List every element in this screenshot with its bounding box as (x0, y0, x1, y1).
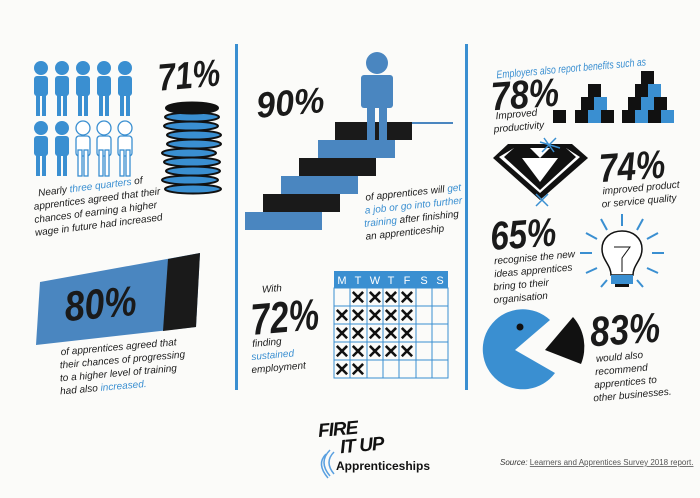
text: productivity: productivity (492, 120, 546, 136)
icon: light bulb (580, 214, 664, 287)
icon: staircase (245, 122, 453, 230)
chart: calendar: ✕ (383, 306, 399, 327)
text: new ideas: bring to their (493, 277, 550, 293)
chart: calendar: ✕ (383, 288, 399, 309)
chart: calendar: F (404, 275, 411, 287)
icon: coin stack (162, 102, 221, 194)
chart: calendar: ✕ (334, 306, 350, 327)
chart: calendar: ✕ (350, 342, 366, 363)
panel: employer benefits (483, 56, 682, 404)
text: quality: improved product (602, 180, 681, 197)
text: new ideas: ideas apprentices (494, 262, 573, 280)
panel: progression 80%: 80% (62, 277, 138, 330)
text: job or training: of apprentices will get (365, 183, 462, 204)
text: progression: had also increased. (60, 379, 147, 397)
text: recommend: apprentices to (594, 375, 658, 391)
chart: calendar: ✕ (383, 342, 399, 363)
chart: calendar (334, 271, 448, 381)
text: quality: or service quality (601, 193, 678, 210)
bar: 80% (36, 253, 200, 345)
chart: calendar: ✕ (399, 324, 415, 345)
panel: 90% staircase (245, 52, 467, 243)
panel: 72% sustained employment (249, 271, 448, 381)
stat: 83%: 83% (588, 304, 662, 355)
text: recommend: recommend (595, 363, 649, 378)
stat: 78%: 78% (490, 71, 560, 119)
stat: 72%: 72% (249, 290, 321, 345)
text: three quarters: Nearly three quarters of (38, 175, 143, 199)
chart: calendar: S (420, 275, 428, 287)
text: new ideas: organisation (493, 291, 549, 306)
chart: calendar: ✕ (383, 324, 399, 345)
chart: calendar: ✕ (399, 342, 415, 363)
chart: calendar: ✕ (399, 288, 415, 309)
chart: calendar: ✕ (367, 306, 383, 327)
text: progression: of apprentices agreed that (60, 337, 178, 358)
text: source: Source: Learners and Apprentices Survey 2018 report. (500, 458, 693, 467)
text: sustained employment: finding (252, 336, 283, 350)
chart: calendar: ✕ (367, 324, 383, 345)
icon: people grid (34, 61, 132, 176)
logo: fire it up apprenticeships: FIRE (317, 417, 360, 442)
divider: left (235, 44, 238, 390)
stat: 71%: 71% (156, 52, 222, 100)
chart: calendar: ✕ (350, 288, 366, 309)
logo: fire it up apprenticeships (317, 417, 430, 478)
stat: 90%: 90% (255, 79, 326, 126)
icon: block pyramids (553, 71, 674, 123)
chart: calendar: ✕ (399, 306, 415, 327)
text: three quarters: wage in future had increased (34, 212, 164, 239)
text: progression: their chances of progressing (59, 349, 186, 371)
text: productivity: Improved (495, 108, 538, 122)
chart: calendar: S (436, 275, 444, 287)
text: job or training: training after finishing (364, 209, 459, 230)
divider: right (465, 44, 468, 390)
icon: person on stairs (361, 52, 393, 140)
chart: calendar: ✕ (367, 288, 383, 309)
text: three quarters: apprentices agreed that their (33, 186, 162, 213)
text: three quarters: chances of earning a higher (34, 200, 158, 226)
chart: calendar: ✕ (334, 360, 350, 381)
stat: 74%: 74% (598, 143, 667, 191)
text: progression: to a higher level of training (60, 363, 178, 384)
text: job or training: a job or go into further (364, 195, 463, 217)
logo: fire it up apprenticeships: IT UP (339, 433, 386, 458)
icon: pac-man (483, 309, 584, 389)
stat: 65%: 65% (489, 211, 558, 259)
text: job or training: an apprenticeship (365, 224, 445, 243)
text: new ideas: recognise the new (494, 249, 576, 267)
chart: calendar: ✕ (350, 306, 366, 327)
heading: employers: Employers also report benefits such as (496, 56, 647, 81)
chart: calendar: ✕ (334, 342, 350, 363)
chart: calendar: ✕ (350, 324, 366, 345)
chart: calendar: M (337, 275, 347, 287)
chart: calendar: T (355, 275, 362, 287)
chart: calendar: T (388, 275, 395, 287)
chart: calendar: ✕ (367, 342, 383, 363)
text: recommend: other businesses. (593, 387, 672, 404)
text: sustained employment: sustained (251, 348, 295, 363)
panel: progression 80% (36, 253, 200, 397)
text: with: With (262, 283, 283, 296)
icon: diamond (493, 138, 588, 206)
chart: calendar: ✕ (350, 360, 366, 381)
chart: calendar: ✕ (334, 324, 350, 345)
chart: calendar: W (370, 275, 381, 287)
logo: fire it up apprenticeships: Apprenticeships (336, 459, 430, 473)
text: sustained employment: employment (251, 360, 307, 376)
text: recommend: would also (596, 350, 644, 365)
panel: earnings (30, 52, 222, 239)
